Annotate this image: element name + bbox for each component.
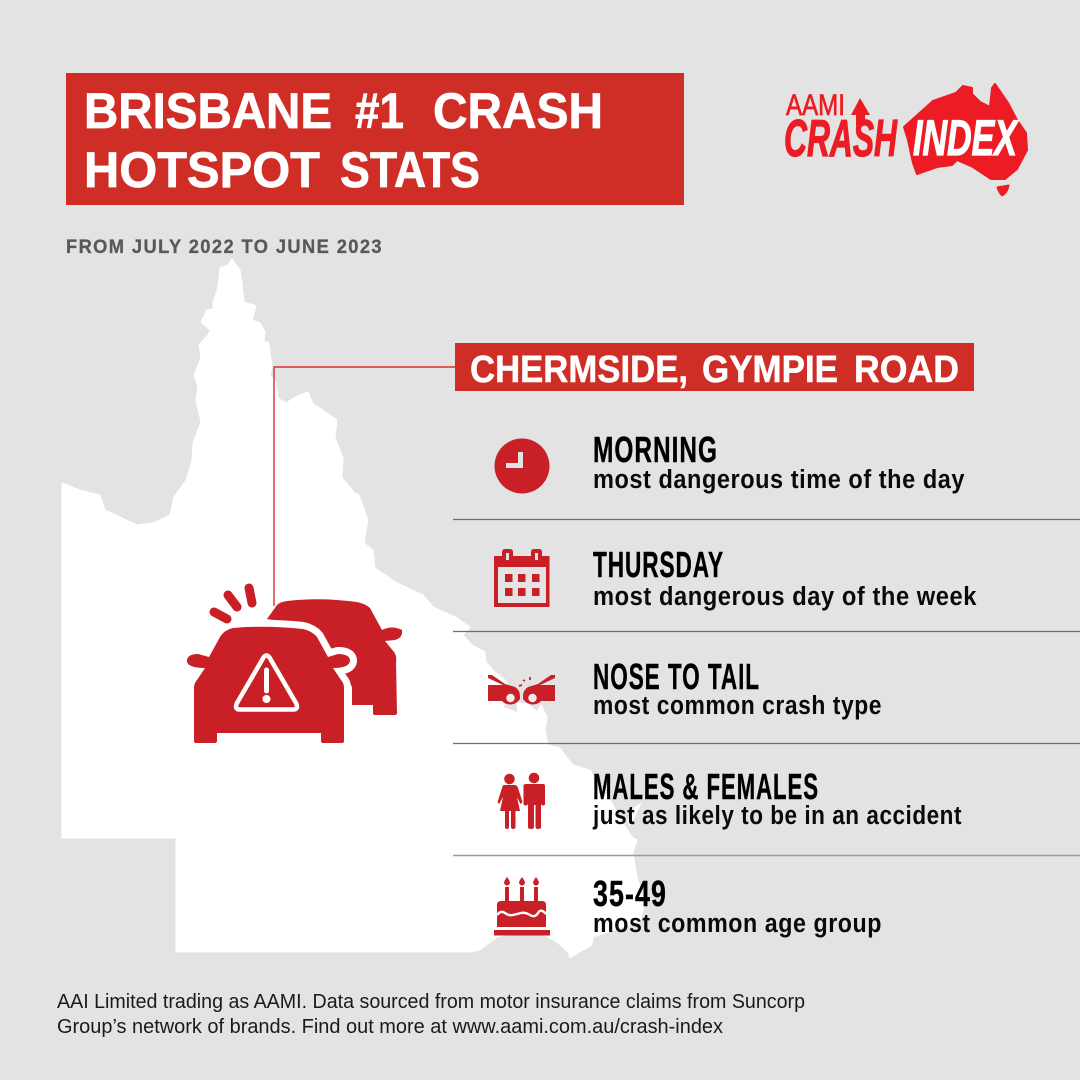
- callout line: [274, 367, 456, 606]
- map: Queensland silhouette: [62, 259, 645, 958]
- stat: morning: MORNING: [593, 429, 718, 470]
- stat: nose to tail: most common crash type: [593, 692, 882, 720]
- stat: morning: most dangerous time of the day: [593, 466, 965, 494]
- icon: crashed cars with warning sign: [187, 588, 402, 743]
- title banner: CRASH: [433, 83, 603, 139]
- icon: calendar: [494, 549, 550, 607]
- stat: nose to tail: [488, 656, 882, 720]
- icon: two cars colliding: [488, 675, 555, 704]
- icon: birthday cake: [494, 877, 550, 936]
- stat: Thursday: THURSDAY: [593, 544, 724, 585]
- footer note: [57, 991, 805, 1038]
- panel: Chermside label: ROAD: [854, 349, 959, 391]
- title banner: [66, 73, 684, 205]
- stat: males and females: MALES & FEMALES: [593, 766, 819, 807]
- title banner: #1: [355, 83, 404, 139]
- panel: Chermside label: [455, 343, 974, 391]
- stat: age group: [494, 873, 882, 938]
- stat: Thursday: [494, 544, 977, 611]
- stat: age group: most common age group: [593, 910, 882, 938]
- date range: FROM JULY 2022 TO JUNE 2023: [66, 236, 383, 258]
- stat: morning: [494, 429, 965, 494]
- logo: AAMI Crash Index: INDEX: [913, 110, 1019, 166]
- footer note: AAI Limited trading as AAMI. Data sourced from motor insurance claims from Suncorp: [57, 991, 805, 1013]
- title banner: BRISBANE: [84, 83, 332, 139]
- panel: Chermside label: GYMPIE: [702, 349, 838, 391]
- stat: males and females: just as likely to be in an accident: [592, 802, 962, 830]
- icon: clock: [494, 438, 550, 494]
- logo: AAMI Crash Index: CRASH: [784, 110, 898, 168]
- footer note: Group’s network of brands. Find out more at www.aami.com.au/crash-index: [57, 1016, 723, 1038]
- stat: males and females: [498, 766, 962, 830]
- stat: nose to tail: NOSE TO TAIL: [593, 656, 760, 697]
- icon: woman and man: [498, 773, 545, 829]
- title banner: STATS: [340, 142, 480, 198]
- logo: AAMI Crash Index: AAMI: [786, 89, 845, 122]
- logo: AAMI Crash Index: [784, 84, 1027, 196]
- panel: Chermside label: CHERMSIDE,: [470, 349, 688, 391]
- title banner: HOTSPOT: [84, 142, 320, 198]
- stat: age group: 35-49: [593, 873, 667, 914]
- stat: Thursday: most dangerous day of the week: [593, 583, 977, 611]
